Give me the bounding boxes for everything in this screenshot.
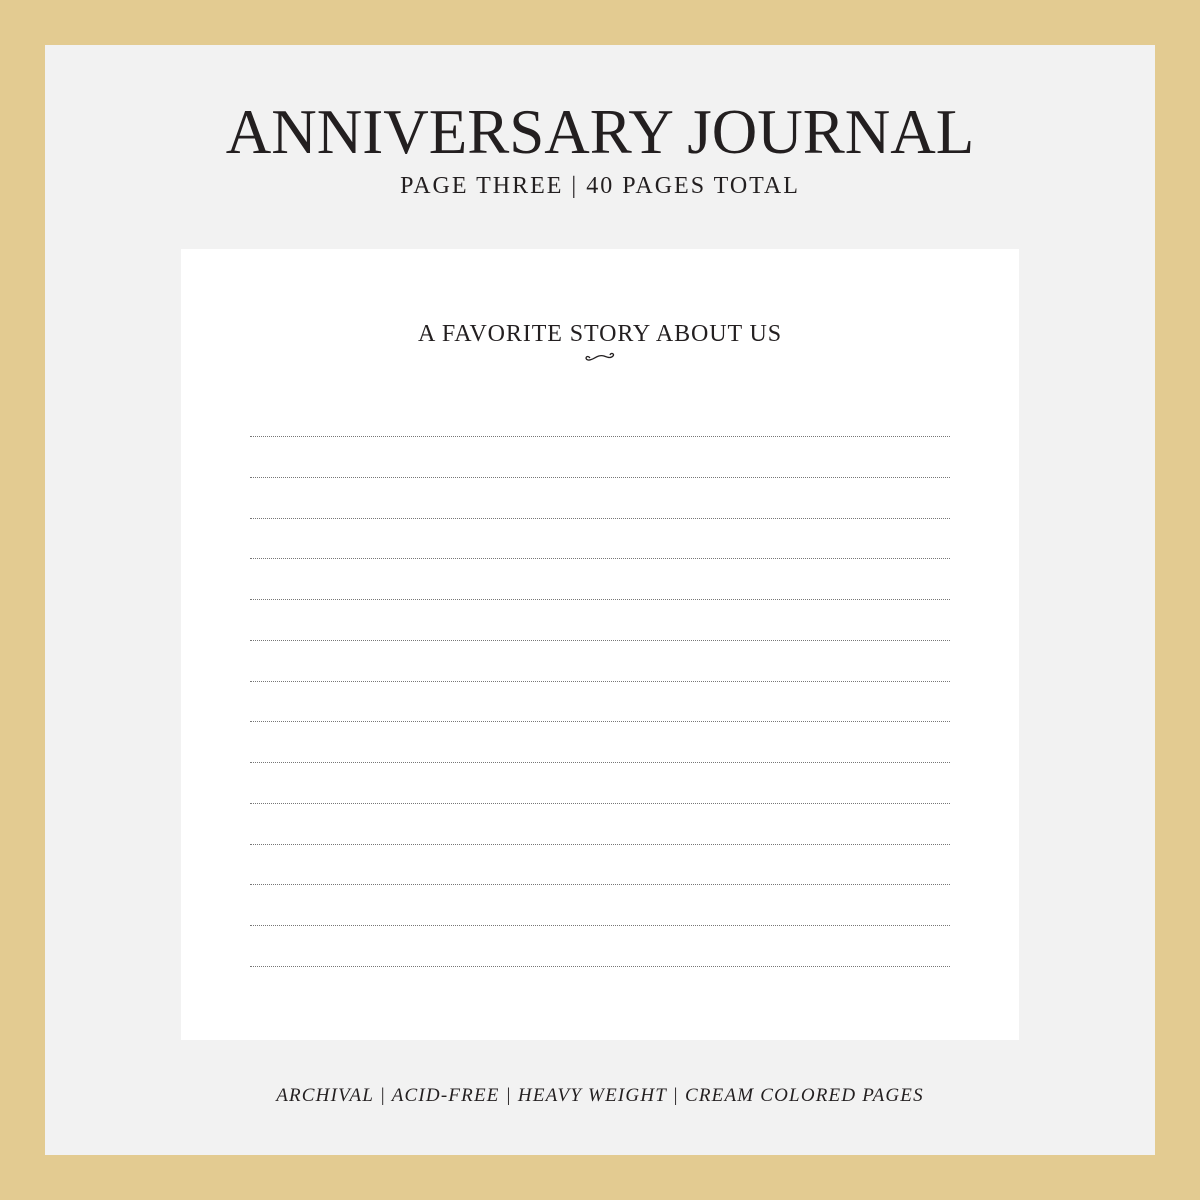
ruled lines <box>250 436 950 967</box>
subtitle: PAGE THREE | 40 PAGES TOTAL <box>400 173 800 199</box>
panel: writing page <box>181 249 1019 1040</box>
title: ANNIVERSARY JOURNAL <box>226 97 974 167</box>
icon: flourish <box>585 352 614 361</box>
heading: story: A FAVORITE STORY ABOUT US <box>418 321 782 347</box>
footer text: ARCHIVAL | ACID-FREE | HEAVY WEIGHT | CREAM COLORED PAGES <box>276 1085 924 1106</box>
